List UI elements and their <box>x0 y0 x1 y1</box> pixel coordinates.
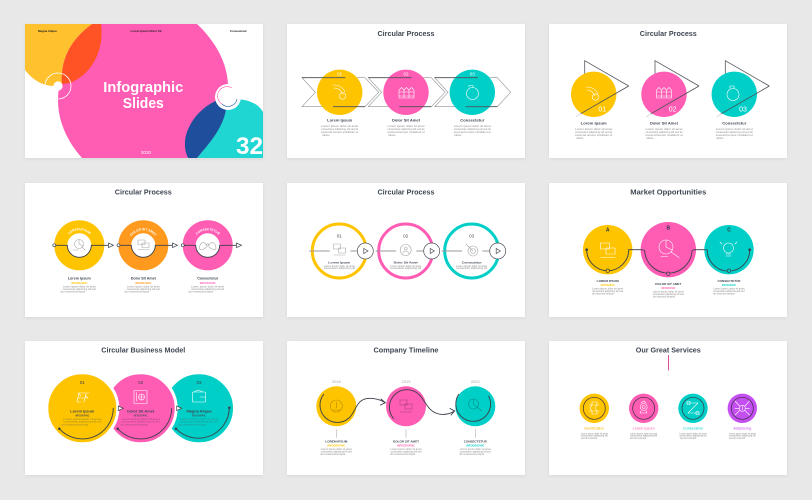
text blocks: Consectetur <box>722 122 747 126</box>
text blocks: INFOGRAPHIC <box>466 443 484 447</box>
text blocks: do eiusmod tempor <box>60 290 86 293</box>
text blocks: LOREM IPSUM <box>325 440 348 444</box>
heading: Circular Business Model <box>101 346 185 354</box>
text blocks: Lorem Ipsum <box>633 426 655 430</box>
letters <box>606 226 731 234</box>
text blocks: consectetur adipiscing elit sed do <box>575 131 613 134</box>
text blocks: labore <box>577 137 584 140</box>
text blocks: INFOGRAPHIC <box>722 283 736 287</box>
text blocks: labore <box>323 134 330 137</box>
text blocks: labore <box>455 134 462 137</box>
icon: apple <box>727 86 739 100</box>
arrowheads <box>58 406 230 430</box>
accent line <box>668 355 669 370</box>
text blocks: labore <box>647 137 654 140</box>
panel: circular business model <box>25 341 263 475</box>
text blocks: consectetur adipiscing elit <box>729 434 756 438</box>
numbers <box>337 234 475 238</box>
text blocks: consectetur adipiscing elit sed <box>63 288 96 291</box>
numbers: 01 <box>337 234 342 238</box>
text blocks: Lorem ipsum dolor sit amet <box>714 288 745 290</box>
text blocks: consectetur adipiscing elit sed <box>592 290 624 293</box>
text blocks: consectetur adipiscing elit <box>324 267 355 270</box>
text blocks: Consectetur <box>683 426 704 430</box>
cover top navigation text: Magna Aliqua <box>38 29 57 33</box>
numbers: 01 <box>337 71 343 76</box>
cover yellow shape <box>25 24 92 86</box>
text blocks: do eiusmod tempor <box>390 453 416 456</box>
text blocks: do eiusmod tempor <box>460 453 485 456</box>
cover year: 2020 <box>141 150 152 155</box>
text blocks: Lorem ipsum dolor sit amet <box>716 128 753 131</box>
years: 2020 <box>471 379 481 384</box>
icon: fence <box>656 88 672 98</box>
arrow curves <box>59 408 229 439</box>
text blocks: Lorem ipsum dolor sit amet <box>454 125 491 128</box>
numbers: 01 <box>80 380 85 385</box>
years: 2019 <box>402 379 411 384</box>
letters: B <box>666 226 670 232</box>
cover blue lens <box>185 99 227 158</box>
text blocks: Lorem ipsum dolor sit amet <box>122 418 160 421</box>
text blocks: eiusmod tempor incididunt ut <box>321 131 359 134</box>
text blocks: INFOGRAPHIC <box>135 281 151 285</box>
text blocks: Lorem ipsum dolor sit amet <box>324 265 355 268</box>
text blocks: consectetur adipiscing elit sed <box>653 293 684 296</box>
circles <box>583 222 754 277</box>
text blocks: Dolor Sit Amet <box>131 277 157 281</box>
text blocks: do eiusmod tempor <box>120 423 148 426</box>
text blocks: eiusmod tempor incididunt ut <box>575 134 613 137</box>
text blocks: sed do eiusmod <box>729 437 746 440</box>
text blocks: do eiusmod tempor <box>592 292 614 296</box>
text blocks: Lorem ipsum dolor sit amet <box>390 265 422 268</box>
text blocks: Dolor Sit Amet <box>650 122 679 126</box>
text blocks: DOLOR SIT AMET <box>393 440 419 444</box>
numbers: 03 <box>196 380 202 385</box>
text blocks: Lorem Ipsum <box>68 277 92 281</box>
text blocks: sed do eiusmod <box>581 437 598 440</box>
text blocks: consectetur adipiscing elit sed <box>191 288 225 291</box>
text blocks <box>60 277 225 293</box>
text blocks: consectetur adipiscing elit sed <box>460 450 491 453</box>
text blocks: do eiusmod tempor <box>653 296 675 298</box>
timeline curve 3 <box>456 394 491 421</box>
letters: A <box>606 228 610 234</box>
curved labels <box>68 228 220 236</box>
text blocks: consectetur adipiscing elit <box>630 434 657 438</box>
text blocks: consectetur adipiscing elit sed <box>122 421 160 424</box>
text blocks: INFOGRAPHIC <box>397 443 415 447</box>
triangle hypotenuse lines <box>576 86 769 117</box>
text blocks: consectetur adipiscing elit sed <box>714 290 745 293</box>
text blocks: eiusmod tempor incididunt ut <box>454 131 491 134</box>
heading: Circular Process <box>640 29 697 38</box>
panel: circular process triangles <box>549 24 787 158</box>
numbers: 01 <box>598 106 606 113</box>
text blocks: Lorem ipsum dolor sit amet <box>592 288 624 290</box>
heading: Market Opportunities <box>630 187 706 196</box>
cover top navigation text <box>38 29 248 33</box>
text blocks: Dolor Sit Amet <box>392 118 421 122</box>
icons <box>589 401 750 415</box>
text blocks: consectetur adipiscing elit sed do <box>388 128 425 131</box>
text blocks: Lorem ipsum dolor sit amet <box>63 418 102 421</box>
start dots and arrowheads <box>53 243 241 248</box>
circle 1 <box>317 70 362 115</box>
rings <box>312 224 499 278</box>
heading: Company Timeline <box>374 346 438 354</box>
text blocks <box>62 409 219 426</box>
icon: apple <box>466 86 478 100</box>
text blocks: Lorem Ipsum <box>327 118 353 122</box>
text blocks: Lorem ipsum dolor sit amet <box>460 448 491 451</box>
text blocks: Magna Aliqua <box>186 409 212 413</box>
letters: C <box>727 228 731 234</box>
heading: Circular Process <box>378 29 434 38</box>
text blocks: do eiusmod tempor <box>188 290 214 293</box>
connecting arc line <box>587 250 750 273</box>
icon: banana coin <box>586 87 599 100</box>
text blocks: Lorem ipsum dolor sit amet <box>646 128 683 131</box>
icons <box>600 240 737 258</box>
numbers: 03 <box>470 71 475 76</box>
text blocks: consectetur adipiscing elit sed <box>180 421 219 424</box>
numbers <box>598 106 747 113</box>
text blocks: Dolor Sit Amet <box>394 260 418 264</box>
text blocks: consectetur adipiscing elit sed <box>63 421 102 424</box>
text blocks: consectetur adipiscing elit <box>581 434 608 438</box>
text blocks: labore <box>717 137 724 140</box>
numbers <box>80 380 202 385</box>
text blocks: consectetur adipiscing elit sed <box>321 450 352 453</box>
panel: company timeline <box>287 341 525 475</box>
icon: fence <box>399 88 414 98</box>
text blocks: INFOGRAPHIC <box>327 443 345 447</box>
text blocks <box>320 440 491 456</box>
text blocks: consectetur adipiscing elit sed <box>127 288 160 291</box>
circle 3 <box>450 70 495 115</box>
cover top navigation text: Consectetur <box>230 29 248 33</box>
text blocks <box>575 122 753 140</box>
text blocks: INFOGRAPHIC <box>192 414 206 418</box>
cover pink shape <box>58 24 228 158</box>
text blocks: INFOGRAPHIC <box>661 286 675 290</box>
text blocks: Lorem ipsum dolor sit amet <box>191 285 225 288</box>
text blocks: Lorem ipsum dolor sit amet <box>321 448 352 451</box>
text blocks: eiusmod tempor incididunt ut <box>716 134 753 137</box>
text blocks: Adipiscing <box>733 426 751 430</box>
numbers <box>337 71 475 76</box>
text blocks: Lorem ipsum dolor sit amet <box>180 418 218 421</box>
text blocks: consectetur adipiscing elit sed do <box>716 131 753 134</box>
text blocks: do eiusmod tempor <box>62 423 89 426</box>
circle 2 <box>383 70 429 115</box>
text blocks: Lorem ipsum dolor sit amet <box>581 432 608 435</box>
text blocks: Consectetur <box>462 260 483 264</box>
timeline curve 1 <box>320 394 385 422</box>
text blocks: Lorem Ipsum <box>581 122 608 126</box>
text blocks: sed do eiusmod <box>680 437 697 440</box>
text blocks: Lorem ipsum dolor sit amet <box>575 128 613 131</box>
stem lines <box>336 429 475 438</box>
timeline curve 2 <box>389 390 455 418</box>
text blocks: Lorem ipsum dolor sit amet <box>456 265 488 268</box>
panel: circular process donuts <box>25 183 263 318</box>
inner dark rings <box>583 397 753 419</box>
icon: banana coin <box>333 85 346 99</box>
cover teal shape <box>197 99 263 158</box>
text blocks: INFOGRAPHIC <box>134 414 148 418</box>
text blocks: consectetur adipiscing elit sed do <box>454 128 491 131</box>
text blocks: Lorem Ipsum <box>328 260 351 264</box>
text blocks: Consectetur <box>197 277 219 281</box>
curved labels: DOLOR SIT AMET <box>130 228 157 236</box>
text blocks: do eiusmod tempor <box>178 423 206 426</box>
panel: our great services <box>549 341 787 475</box>
text blocks: do eiusmod tempor <box>124 290 150 293</box>
text blocks: labore <box>389 134 396 137</box>
cover left ring <box>45 73 71 99</box>
text blocks: consectetur adipiscing elit sed do <box>646 131 683 134</box>
numbers: 02 <box>403 71 409 76</box>
text blocks: Lorem ipsum dolor sit amet <box>388 125 425 128</box>
text blocks: consectetur adipiscing elit <box>456 267 488 270</box>
icons <box>77 390 206 404</box>
text blocks: CONSECTETUR <box>464 440 487 444</box>
arc markers <box>586 249 751 275</box>
text blocks: do eiusmod tempor <box>320 453 346 456</box>
icons <box>73 240 216 250</box>
icons <box>330 399 482 412</box>
donuts <box>61 227 226 264</box>
cover orange lens <box>62 24 102 84</box>
connector lines <box>56 245 236 257</box>
numbers: 03 <box>469 234 475 238</box>
text blocks: consectetur adipiscing elit <box>390 267 422 270</box>
text blocks: sed do eiusmod <box>630 437 647 440</box>
numbers: 02 <box>669 106 677 113</box>
triangles back edges <box>585 61 769 86</box>
overlapping circles <box>47 373 234 444</box>
text blocks: consectetur adipiscing elit sed do <box>321 128 359 131</box>
numbers: 02 <box>138 380 144 385</box>
panel: market opportunities <box>549 183 787 317</box>
heading: Circular Process <box>378 187 434 196</box>
text blocks: Lorem ipsum dolor sit amet <box>127 285 160 288</box>
text blocks: INFOGRAPHIC <box>71 281 87 285</box>
text blocks: Lorem ipsum dolor sit amet <box>653 290 684 294</box>
text blocks: Lorem ipsum dolor sit amet <box>63 285 96 288</box>
text blocks: CONSECTETUR <box>718 279 740 283</box>
cover right ring <box>215 84 241 110</box>
numbers: 03 <box>739 106 747 113</box>
curved labels: CONSECTETUR <box>196 228 220 235</box>
cover title: Infographic <box>103 80 183 96</box>
text blocks: consectetur adipiscing elit sed <box>390 450 422 453</box>
panel: circular process chevrons <box>287 24 525 158</box>
text blocks: Identification <box>584 426 604 430</box>
text blocks: Consectetur <box>460 118 485 122</box>
text blocks <box>592 279 745 298</box>
text blocks: Lorem Ipsum <box>70 409 95 413</box>
heading: Circular Process <box>115 187 172 196</box>
text blocks <box>321 118 491 137</box>
chevron outlines <box>302 78 511 107</box>
text blocks: do eiusmod tempor <box>713 292 735 296</box>
text blocks: INFOGRAPHIC <box>200 281 216 285</box>
text blocks: INFOGRAPHIC <box>601 283 615 287</box>
cover slide number: 32 <box>236 133 263 160</box>
years: 2018 <box>332 379 342 384</box>
chevron dark segments <box>302 78 497 107</box>
text blocks: Lorem ipsum dolor sit amet <box>680 432 707 435</box>
text blocks: INFOGRAPHIC <box>75 414 90 418</box>
text blocks: Lorem ipsum dolor sit amet <box>630 432 657 435</box>
text blocks: Lorem ipsum dolor sit amet <box>321 125 359 128</box>
heading: Our Great Services <box>636 346 701 354</box>
text blocks: LOREM IPSUM <box>597 279 619 283</box>
service circles <box>580 394 757 423</box>
cover title: Slides <box>123 96 164 112</box>
numbers: 02 <box>403 234 409 238</box>
years <box>332 379 481 384</box>
curved labels: LOREM IPSUM <box>68 228 91 234</box>
text blocks: Lorem ipsum dolor sit amet <box>729 432 756 435</box>
panel: cover slide <box>25 24 263 160</box>
cover title <box>103 80 183 112</box>
circles <box>316 386 495 426</box>
text blocks <box>324 260 488 270</box>
text blocks: consectetur adipiscing elit <box>680 434 707 438</box>
icons <box>334 244 478 256</box>
gray connector lines <box>309 250 490 252</box>
text blocks: eiusmod tempor incididunt ut <box>388 131 425 134</box>
text blocks: eiusmod tempor incididunt ut <box>646 134 683 137</box>
play buttons <box>357 243 506 259</box>
text blocks <box>581 426 756 440</box>
text blocks: Dolor Sit Amet <box>127 409 155 413</box>
text blocks: Lorem ipsum dolor sit amet <box>390 448 422 451</box>
text blocks: DOLOR SIT AMET <box>655 282 682 286</box>
cover top navigation text: Lorem Ipsum Dolor Sit <box>130 29 162 33</box>
circles <box>571 72 757 117</box>
panel: circular process rings <box>287 183 525 317</box>
